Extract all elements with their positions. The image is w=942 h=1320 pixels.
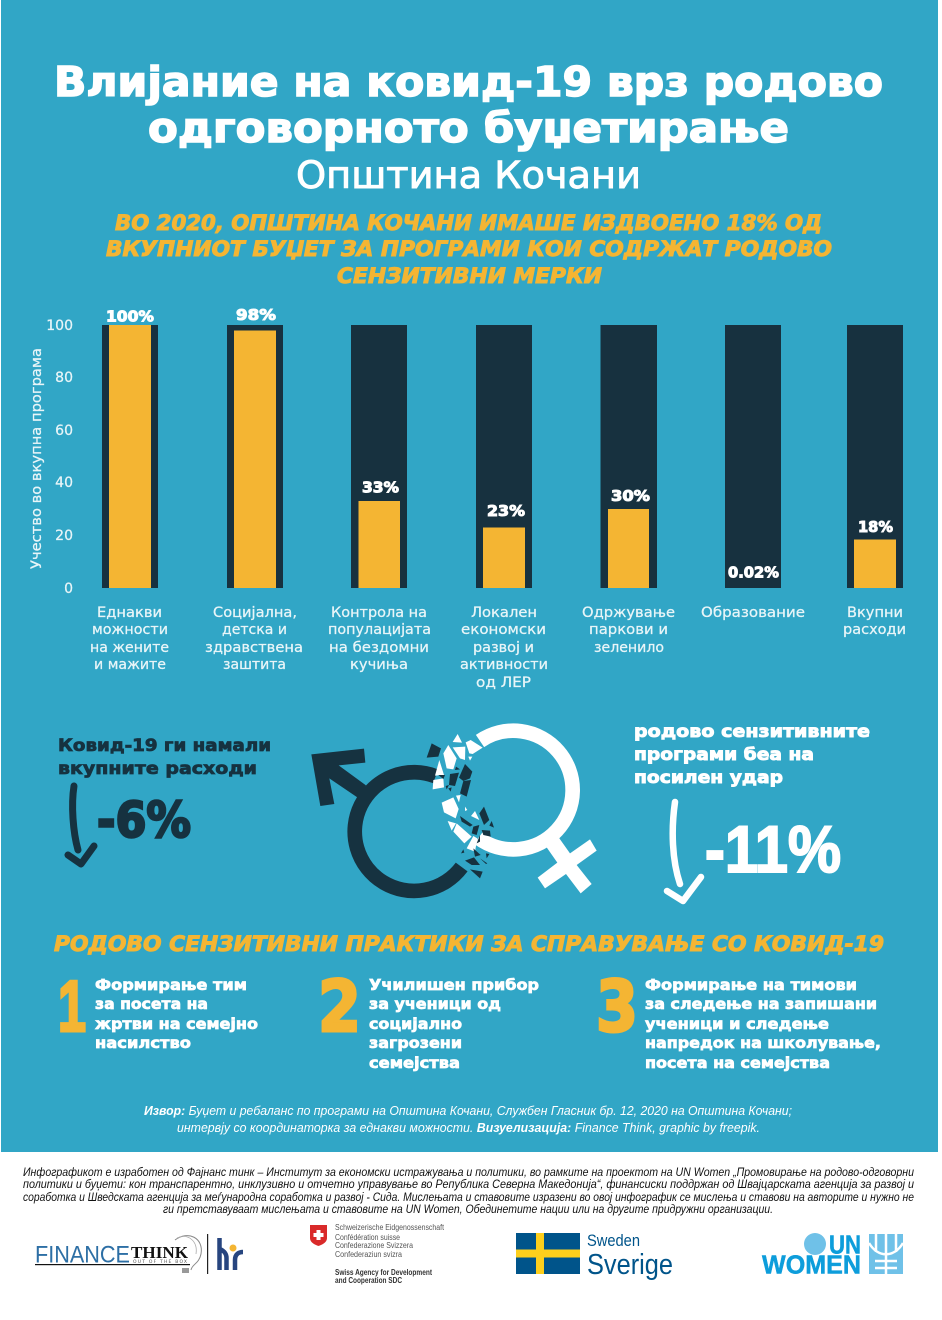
- category labels: и мажите: [94, 657, 166, 673]
- practices heading: РОДОВО СЕНЗИТИВНИ ПРАКТИКИ ЗА СПРАВУВАЊЕ СО КОВИД-19: [54, 932, 884, 956]
- logo: Swiss Agency for Development and Cooperation: Confédération suisse: [335, 1233, 400, 1242]
- bar: parks and greenery 30%: [600, 325, 657, 588]
- bar: stray dogs 33%: [351, 325, 407, 588]
- stat: gender sensitive programmes -11%: [634, 722, 870, 901]
- y axis ticks: 80: [55, 370, 73, 386]
- category labels: активности: [460, 657, 548, 673]
- bar: equal opportunities 100%: [102, 308, 158, 588]
- logo: UN Women: WOMEN: [762, 1250, 861, 1280]
- source note: Извор: Буџет и ребаланс по програми на Општина Кочани, Службен Гласник бр. 12, 2020 на Општина Кочани;: [144, 1103, 792, 1118]
- male symbol: [311, 749, 462, 891]
- bar: local economic development 23%: [476, 325, 532, 588]
- headline finding: [106, 211, 832, 288]
- logo: Finance Think and hr: [35, 1234, 243, 1274]
- stat: gender sensitive programmes -11%: -11%: [705, 812, 841, 886]
- female symbol: [433, 731, 597, 893]
- y axis ticks: 0: [64, 581, 73, 597]
- category labels: Образование: [701, 605, 805, 621]
- logo: Swiss Agency for Development and Cooperation: Swiss Agency for Development: [335, 1268, 432, 1277]
- logo: Finance Think and hr: THINK: [131, 1243, 189, 1262]
- practice 2: Училишен прибор: [369, 976, 539, 994]
- bar chart: [29, 306, 906, 691]
- stat: total expenditure -6%: вкупните расходи: [58, 759, 257, 779]
- category labels: економски: [461, 622, 546, 638]
- category labels: заштита: [223, 657, 286, 673]
- category labels: развој и: [473, 640, 534, 656]
- dark shards: [427, 743, 494, 878]
- category labels: од ЛЕР: [476, 675, 531, 691]
- category labels: паркови и: [589, 622, 668, 638]
- practice 1: 1: [58, 967, 86, 1047]
- practice 1: насилство: [95, 1034, 191, 1052]
- practice 2: [318, 966, 539, 1072]
- practice 2: за ученици од: [369, 995, 501, 1013]
- stat: total expenditure -6%: -6%: [97, 792, 191, 849]
- logo: Swiss Agency for Development and Cooperation: Confederaziun svizra: [335, 1250, 402, 1259]
- category labels: на жените: [90, 640, 169, 656]
- y axis ticks: [46, 318, 73, 597]
- bar: social protection 98%: 98%: [236, 306, 276, 324]
- practice 1: [58, 967, 258, 1052]
- bar: total expenditure 18%: 18%: [858, 518, 893, 536]
- category labels: Локален: [471, 605, 537, 621]
- category labels: кучиња: [350, 657, 408, 673]
- y axis title: Учество во вкупна програма: [29, 348, 45, 569]
- disclaimer text: [23, 1167, 915, 1216]
- logo: Finance Think and hr: OUT OF THE BOX: [133, 1259, 187, 1265]
- practice 3: [596, 966, 881, 1072]
- headline finding: СЕНЗИТИВНИ МЕРКИ: [337, 264, 602, 288]
- title: [54, 58, 883, 152]
- logo: Swiss Agency for Development and Cooperation: [310, 1223, 445, 1285]
- logo: UN Women: UN: [829, 1230, 861, 1260]
- category labels: на бездомни: [329, 640, 429, 656]
- y axis ticks: 60: [55, 423, 73, 439]
- logo: Sweden Sverige: [516, 1231, 673, 1281]
- category labels: можности: [92, 622, 168, 638]
- bar: parks and greenery 30%: 30%: [611, 487, 650, 505]
- practice 1: Формирање тим: [95, 976, 247, 994]
- practice 3: ученици и следење: [645, 1015, 829, 1033]
- practice 3: 3: [596, 966, 638, 1048]
- category labels: [90, 605, 906, 691]
- logo: Finance Think and hr: FINANCE: [35, 1242, 130, 1268]
- bar: local economic development 23%: 23%: [487, 502, 525, 520]
- stat: total expenditure -6%: [58, 736, 271, 864]
- stat: gender sensitive programmes -11%: родово сензитивните: [634, 722, 870, 742]
- category labels: Вкупни: [847, 605, 903, 621]
- practice 3: напредок на школување,: [645, 1034, 881, 1052]
- practice 3: Формирање на тимови: [645, 976, 857, 994]
- practice 3: за следење на запишани: [645, 995, 877, 1013]
- category labels: детска и: [222, 622, 287, 638]
- practice 2: семејства: [369, 1054, 460, 1072]
- source note: интервју со координаторка за еднакви можности. Визуелизација: Finance Think, graphic by freepik.: [177, 1120, 760, 1135]
- bar: education 0.02%: 0.02%: [728, 564, 779, 582]
- subtitle: Општина Кочани: [296, 154, 641, 197]
- practice 3: посета на семејства: [645, 1054, 830, 1072]
- headline finding: ВКУПНИОТ БУЏЕТ ЗА ПРОГРАМИ КОИ СОДРЖАТ РОДОВО: [106, 237, 832, 261]
- category labels: зеленило: [594, 640, 664, 656]
- source note: [144, 1103, 792, 1135]
- practice 1: за посета на: [95, 995, 208, 1013]
- category labels: Социјална,: [213, 605, 297, 621]
- disclaimer text: ги претставуваат мислењата и ставовите на UN Women, Обединетите нации или на другите придружни организации.: [163, 1204, 773, 1216]
- logo: Swiss Agency for Development and Cooperation: and Cooperation SDC: [335, 1276, 402, 1285]
- logo: Swiss Agency for Development and Cooperation: Confederazione Svizzera: [335, 1241, 413, 1250]
- y axis ticks: 20: [55, 528, 73, 544]
- category labels: Одржување: [582, 605, 675, 621]
- y axis ticks: 40: [55, 475, 73, 491]
- stat: gender sensitive programmes -11%: посилен удар: [634, 768, 783, 788]
- icon: down arrow dark: [68, 786, 94, 864]
- title: Влијание на ковид-19 врз родово: [54, 58, 883, 106]
- bar: education 0.02%: [725, 325, 781, 588]
- logo: UN Women: [762, 1230, 903, 1280]
- y axis ticks: 100: [46, 318, 73, 334]
- stat: gender sensitive programmes -11%: програми беа на: [634, 745, 814, 765]
- icon: down arrow white: [667, 802, 701, 901]
- logo: Sweden Sverige: Sweden: [587, 1231, 640, 1250]
- stat: total expenditure -6%: Ковид-19 ги намали: [58, 736, 271, 756]
- category labels: здравствена: [205, 640, 303, 656]
- practice 1: жртви на семејно: [95, 1015, 258, 1033]
- practice 2: социјално: [369, 1015, 462, 1033]
- logo: Sweden Sverige: Sverige: [587, 1249, 673, 1281]
- bar: total expenditure 18%: [847, 325, 903, 588]
- practice 2: 2: [318, 966, 361, 1048]
- icon: shattered gender symbols: [311, 731, 597, 893]
- category labels: Контрола на: [331, 605, 427, 621]
- bar: stray dogs 33%: 33%: [362, 478, 399, 496]
- category labels: расходи: [843, 622, 906, 638]
- title: одговорното буџетирање: [148, 104, 789, 152]
- headline finding: ВО 2020, ОПШТИНА КОЧАНИ ИМАШЕ ИЗДВОЕНО 18% ОД: [115, 211, 822, 235]
- bar: equal opportunities 100%: 100%: [106, 308, 154, 326]
- logo: Swiss Agency for Development and Cooperation: Schweizerische Eidgenossenschaft: [335, 1223, 445, 1232]
- bar: social protection 98%: [227, 306, 283, 588]
- category labels: Еднакви: [97, 605, 162, 621]
- practice 2: загрозени: [369, 1034, 462, 1052]
- category labels: популацијата: [328, 622, 431, 638]
